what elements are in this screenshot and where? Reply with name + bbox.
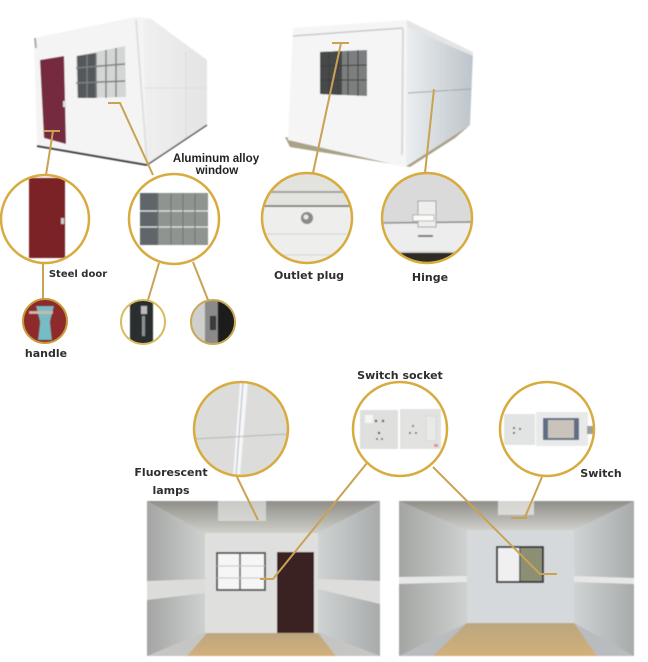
callout circle: fluorescent lamps [194, 382, 288, 476]
label: switch: Switch [580, 467, 622, 480]
leader lines [43, 43, 557, 579]
label: outlet plug: Outlet plug [274, 269, 344, 282]
label: switch socket: Switch socket [357, 369, 443, 382]
callout circle: handle [23, 299, 67, 343]
callout circle: window lock [121, 300, 165, 344]
label: hinge: Hinge [412, 271, 448, 284]
callout circle: steel door [1, 175, 89, 263]
exterior photo: container house with door [34, 17, 207, 165]
callout circle: aluminum alloy window [129, 174, 219, 264]
callout circle: switch socket [353, 382, 447, 476]
exterior photo: container house with window [285, 20, 473, 167]
label: handle: handle [25, 347, 67, 360]
label: aluminum alloy window: window [195, 164, 239, 177]
label: aluminum alloy window: Aluminum alloy [173, 152, 260, 165]
callout circle: outlet plug [262, 173, 352, 263]
interior photo: room with door [147, 501, 380, 656]
label: fluorescent lamps: lamps [152, 484, 190, 497]
label: steel door: Steel door [49, 269, 107, 280]
interior photo: room with window [399, 501, 634, 656]
callout circle: window latch [191, 300, 235, 344]
callout circle: switch [500, 382, 595, 476]
label: fluorescent lamps: Fluorescent [134, 466, 208, 479]
callout circle: hinge [382, 173, 472, 265]
